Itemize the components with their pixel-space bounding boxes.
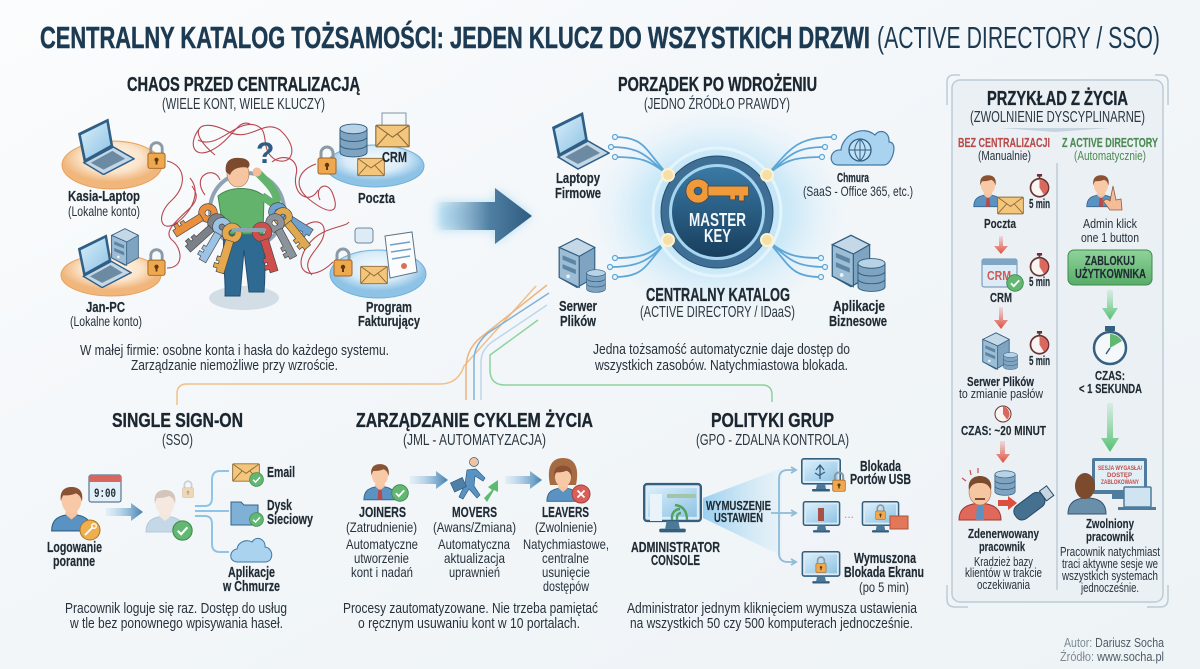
disc: Kasia-Laptop xyxy=(62,118,165,189)
illustration: angry employee stealing data xyxy=(959,468,1055,523)
icon: mover xyxy=(450,458,498,502)
illustration: confused person with keys: ? xyxy=(256,137,274,170)
column: leavers: dostępów xyxy=(543,578,590,594)
column: leavers: LEAVERS xyxy=(542,505,589,521)
icon: network drive xyxy=(231,502,263,526)
arrow: joiners to movers xyxy=(410,471,448,489)
column: joiners: JOINERS xyxy=(359,505,406,521)
step: file server: 5 min xyxy=(1029,353,1050,368)
heading: order: (JEDNO ŹRÓDŁO PRAWDY) xyxy=(644,94,790,113)
heading: order: PORZĄDEK PO WDROŻENIU xyxy=(618,73,817,96)
disc: Poczta CRM: CRM xyxy=(382,150,407,166)
label: cloud apps: w Chmurze xyxy=(222,579,280,595)
icon: cloud apps xyxy=(231,538,272,562)
step: CRM: CRM xyxy=(990,290,1012,305)
text: SSO description: w tle bez ponownego wpisywania haseł. xyxy=(69,615,283,632)
label: under 1 second xyxy=(1079,368,1142,396)
text: chaos description: W małej firmie: osobne konta i hasła do każdego systemu. xyxy=(80,342,389,359)
label: business apps: Aplikacje xyxy=(833,299,885,315)
column: leavers: Natychmiastowe, xyxy=(523,536,609,552)
circuit traces xyxy=(608,134,836,280)
label: Program Fakturujący: Fakturujący xyxy=(358,314,420,330)
label: company laptops: Laptopy xyxy=(556,171,600,187)
label: file server: Plików xyxy=(560,314,597,330)
label: business apps: Biznesowe xyxy=(829,314,887,330)
label: business apps xyxy=(829,299,887,330)
label: administrator console: CONSOLE xyxy=(651,553,700,569)
text: chaos description xyxy=(80,342,389,374)
arrow: wait to theft xyxy=(996,441,1010,463)
total time: 20 minutes xyxy=(961,406,1046,438)
step: CRM xyxy=(982,253,1050,305)
disc: Poczta CRM xyxy=(318,113,424,187)
label: file server: Serwer xyxy=(559,299,597,315)
text: JML description: Procesy zautomatyzowane. Nie trzeba pamiętać xyxy=(343,600,598,617)
label: angry employee: oczekiwania xyxy=(977,577,1031,592)
disc: Program Fakturujący xyxy=(330,228,426,298)
label: angry employee xyxy=(965,526,1042,592)
heading: SSO: SINGLE SIGN-ON xyxy=(112,410,243,432)
label: company laptops: Firmowe xyxy=(555,186,601,202)
text: order description: wszystkich zasobów. Natychmiastowa blokada. xyxy=(594,357,848,374)
label: dismissed employee xyxy=(1060,516,1160,595)
master key hub xyxy=(653,148,781,276)
icon: ghost identity xyxy=(146,481,193,540)
beam: settings push xyxy=(703,468,782,556)
label: forced screen lock: Blokada Ekranu xyxy=(844,565,924,581)
label: Kasia-Laptop xyxy=(68,189,140,219)
label: administrator console xyxy=(631,540,720,569)
text: SSO description xyxy=(65,600,287,632)
central glow xyxy=(582,102,852,322)
label: Jan-PC: Jan-PC xyxy=(86,300,125,316)
label: cloud: Chmura xyxy=(837,170,869,185)
arrow: timer to session end xyxy=(1101,403,1119,452)
step: file server: Serwer Plików xyxy=(967,374,1035,389)
panel: group policies xyxy=(627,410,924,632)
text: order description xyxy=(593,341,850,374)
column heading: automatic xyxy=(1062,135,1158,163)
label: cloud apps xyxy=(222,565,280,595)
label: central catalog: CENTRALNY KATALOG xyxy=(646,285,790,305)
step: file server: to zmianie pasłów xyxy=(959,386,1043,401)
label: forced screen lock xyxy=(844,551,924,595)
icon: business apps xyxy=(832,235,885,291)
icon: monitor centre xyxy=(803,502,840,533)
illustration: blocked employee: ZABLOKOWANY xyxy=(1101,479,1139,486)
label: central catalog: (ACTIVE DIRECTORY / IDaaS) xyxy=(640,304,795,321)
column: movers: (Awans/Zmiana) xyxy=(433,519,516,535)
column heading: manual: (Manualnie) xyxy=(978,148,1031,163)
column: joiners: Automatyczne xyxy=(346,536,418,552)
icon: user with key and calendar: 9:00 xyxy=(94,486,116,501)
icon: joiner xyxy=(364,464,408,501)
label: morning login xyxy=(47,540,102,570)
master key hub: KEY xyxy=(704,226,731,246)
label: dismissed employee: pracownik xyxy=(1086,529,1135,544)
step: mail: 5 min xyxy=(1029,196,1050,211)
column: leavers xyxy=(523,505,609,594)
icon: locked monitor with laptop xyxy=(862,502,908,533)
panel: order after implementation xyxy=(552,73,913,374)
icon: USB-locked monitor xyxy=(802,459,845,492)
column: movers: Automatyczna xyxy=(438,536,510,552)
step: CRM: CRM xyxy=(987,268,1011,283)
button: block user: UŻYTKOWNIKA xyxy=(1075,266,1146,281)
step: mail: Poczta xyxy=(984,216,1017,231)
label: cloud apps: Aplikacje xyxy=(228,565,275,581)
arrow: movers to leavers xyxy=(505,471,542,489)
label: dismissed employee: Pracownik natychmiast xyxy=(1060,544,1160,559)
text: GPO description: na wszystkich 50 czy 500 komputerach jednocześnie. xyxy=(630,615,913,632)
heading: GPO: POLITYKI GRUP xyxy=(711,410,834,432)
tangled red lines xyxy=(162,123,349,275)
label: angry employee: Zdenerwowany xyxy=(968,526,1040,541)
label: Poczta: Poczta xyxy=(358,191,396,207)
column: joiners: (Zatrudnienie) xyxy=(346,519,417,535)
text: order description: Jedna tożsamość automatycznie daje dostęp do xyxy=(593,341,850,358)
label: forced screen lock: Wymuszona xyxy=(854,551,917,567)
label: enforce settings xyxy=(706,498,771,525)
label: Jan-PC xyxy=(70,300,142,329)
label: Kasia-Laptop: Kasia-Laptop xyxy=(68,189,140,205)
column heading: automatic: (Automatycznie) xyxy=(1074,148,1146,163)
step: mail xyxy=(974,174,1050,231)
label: USB port lock: Blokada xyxy=(860,459,902,475)
label: Kasia-Laptop: (Lokalne konto) xyxy=(68,203,140,219)
arrow: from chaos to order xyxy=(437,188,532,244)
text: GPO description: Administrator jednym kliknięciem wymusza ustawienia xyxy=(627,600,918,617)
label: forced screen lock: (po 5 min) xyxy=(859,579,909,595)
icon: stopwatch xyxy=(1094,326,1126,364)
illustration: blocked employee: DOSTĘP xyxy=(1107,472,1133,479)
title: CENTRALNY KATALOG TOŻSAMOŚCI: JEDEN KLUCZ DO WSZYSTKICH DRZWI xyxy=(40,19,870,55)
column: movers: aktualizacja xyxy=(444,550,505,566)
label: dismissed employee: jednocześnie. xyxy=(1080,580,1139,595)
icon: email xyxy=(233,464,263,486)
branching connectors xyxy=(195,471,229,552)
label: company laptops xyxy=(555,171,601,202)
icon: company laptops xyxy=(552,112,609,169)
column heading: manual xyxy=(958,135,1050,163)
text: JML description: o ręcznym usuwaniu kont w 10 portalach. xyxy=(358,615,580,632)
icon: cloud xyxy=(831,131,894,165)
heading: example xyxy=(970,87,1145,126)
column: joiners: utworzenie xyxy=(354,550,409,566)
label: email: Email xyxy=(267,465,295,481)
text: SSO description: Pracownik loguje się raz. Dostęp do usług xyxy=(65,600,287,617)
heading: JML: (JML - AUTOMATYZACJA) xyxy=(403,432,546,449)
heading: chaos: (WIELE KONT, WIELE KLUCZY) xyxy=(162,96,325,113)
column: leavers: (Zwolnienie) xyxy=(535,519,597,535)
bracket arrows xyxy=(771,467,796,565)
label: angry employee: klientów w trakcie xyxy=(965,565,1042,580)
heading: GPO: (GPO - ZDALNA KONTROLA) xyxy=(696,432,849,449)
label: network drive xyxy=(267,498,313,528)
arrow: CRM to file server xyxy=(994,307,1008,329)
label: angry employee: pracownik xyxy=(979,539,1026,554)
column: joiners xyxy=(346,505,418,580)
arrow: login to identity xyxy=(106,503,143,521)
panel: lifecycle management xyxy=(343,409,609,632)
arrow: mail to CRM xyxy=(994,236,1008,254)
label: central catalog xyxy=(640,285,795,321)
label: enforce settings: WYMUSZENIE xyxy=(706,498,771,513)
heading: JML xyxy=(356,409,593,449)
column: movers: uprawnień xyxy=(449,564,500,580)
illustration: blocked employee: SESJA WYGASŁA/ xyxy=(1098,465,1142,472)
column: leavers: centralne xyxy=(542,550,589,566)
heading: example: PRZYKŁAD Z ŻYCIA xyxy=(987,87,1128,110)
panel: chaos before centralization xyxy=(61,74,426,374)
heading: SSO: (SSO) xyxy=(162,432,193,449)
label: administrator console: ADMINISTRATOR xyxy=(631,540,720,556)
icon: screen-locked monitor xyxy=(802,552,840,584)
column: joiners: kont i nadań xyxy=(351,564,413,580)
step: CRM: 5 min xyxy=(1029,274,1050,289)
icon: user with key and calendar xyxy=(52,475,121,540)
label: morning login: poranne xyxy=(53,554,95,570)
label: morning login: Logowanie xyxy=(47,540,102,556)
label: Jan-PC: (Lokalne konto) xyxy=(70,313,142,329)
step: admin click: one 1 button xyxy=(1081,230,1139,245)
text: chaos description: Zarządzanie niemożliwe przy wzroście. xyxy=(131,357,338,374)
label: USB port lock: Portów USB xyxy=(850,472,911,488)
label: angry employee: Kradzież bazy xyxy=(974,554,1033,569)
button: block user xyxy=(1068,250,1152,285)
column heading: automatic: Z ACTIVE DIRECTORY xyxy=(1062,135,1158,150)
column heading: manual: BEZ CENTRALIZACJI xyxy=(958,135,1050,150)
label: file server xyxy=(559,299,597,330)
heading: order xyxy=(618,73,817,113)
label: enforce settings: USTAWIEŃ xyxy=(714,510,763,525)
label: cloud xyxy=(803,170,913,199)
label: Program Fakturujący xyxy=(358,300,420,330)
label: network drive: Sieciowy xyxy=(267,512,313,528)
panel frame xyxy=(947,75,1168,607)
label: USB port lock xyxy=(850,459,911,488)
label: dismissed employee: traci aktywne sesje we xyxy=(1062,556,1158,571)
heading: chaos xyxy=(127,74,360,113)
heading: GPO xyxy=(696,410,849,449)
connector lines to bottom panels xyxy=(177,285,772,405)
column: movers: MOVERS xyxy=(452,505,497,521)
arrow: button to timer xyxy=(1102,290,1118,320)
column: movers xyxy=(433,505,516,580)
icon: leaver xyxy=(547,458,590,503)
dots: ... xyxy=(844,507,854,521)
step: admin click xyxy=(1081,175,1139,245)
column: leavers: usunięcie xyxy=(542,564,590,580)
step: file server xyxy=(959,331,1050,401)
label: under 1 second: < 1 SEKUNDA xyxy=(1079,381,1142,396)
label: dismissed employee: Zwolniony xyxy=(1086,516,1135,531)
master key hub: MASTER xyxy=(689,210,746,230)
disc: Jan-PC xyxy=(61,229,165,296)
label: Program Fakturujący: Program xyxy=(366,300,412,316)
credits: Autor: Dariusz Socha xyxy=(1064,635,1165,650)
step: admin click: Admin klick xyxy=(1083,216,1137,231)
panel: real-life example xyxy=(947,75,1168,607)
panel: single sign-on xyxy=(47,410,313,632)
label: cloud: (SaaS - Office 365, etc.) xyxy=(803,183,913,199)
heading: SSO xyxy=(112,410,243,449)
text: GPO description xyxy=(627,600,918,632)
credits: Źródło: www.socha.pl xyxy=(1060,649,1164,664)
heading: chaos: CHAOS PRZED CENTRALIZACJĄ xyxy=(127,74,360,96)
total time: 20 minutes: CZAS: ~20 MINUT xyxy=(961,423,1046,438)
illustration: blocked employee xyxy=(1068,458,1156,514)
label: under 1 second: CZAS: xyxy=(1095,368,1125,383)
button: block user: ZABLOKUJ xyxy=(1085,253,1135,268)
icon: file server xyxy=(559,239,605,292)
heading: JML: ZARZĄDZANIE CYKLEM ŻYCIA xyxy=(356,409,593,432)
text: JML description xyxy=(343,600,598,632)
icon: administrator console xyxy=(644,484,701,532)
label: network drive: Dysk xyxy=(267,498,293,514)
label: dismissed employee: wszystkich systemach xyxy=(1061,568,1158,583)
illustration: confused person with keys xyxy=(170,137,316,310)
credits xyxy=(1060,635,1165,664)
